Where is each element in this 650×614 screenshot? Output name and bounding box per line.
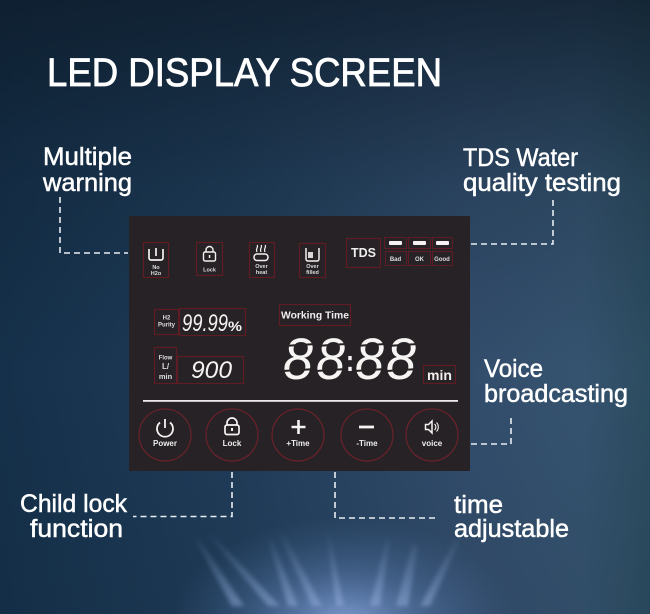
indicator: lock: Lock bbox=[203, 268, 217, 274]
min label: min bbox=[427, 367, 452, 383]
time display: 8 bbox=[355, 327, 384, 392]
H2 purity readout: H2 bbox=[163, 316, 171, 322]
flow readout: 900 bbox=[191, 357, 233, 384]
min label bbox=[424, 366, 456, 384]
button: plus time: +Time bbox=[286, 439, 310, 448]
indicator: over filled: Over bbox=[306, 264, 320, 270]
working time label bbox=[280, 304, 350, 326]
flow readout: L/ bbox=[162, 362, 170, 371]
label: TDS water quality testing bbox=[463, 144, 621, 197]
indicator: no water: No bbox=[152, 265, 160, 271]
label: voice broadcasting bbox=[484, 355, 628, 408]
light rays at the bottom bbox=[170, 510, 520, 614]
indicator: lock bbox=[196, 242, 222, 276]
indicator: no water: H2o bbox=[151, 271, 162, 277]
indicator: TDS water quality: Bad bbox=[390, 257, 401, 263]
label: time adjustable: time bbox=[454, 491, 503, 519]
label: multiple warning: Multiple bbox=[43, 143, 132, 171]
indicator: TDS water quality: Good bbox=[434, 257, 450, 263]
time display bbox=[283, 327, 418, 392]
H2 purity readout: % bbox=[228, 318, 243, 334]
segment gaps bbox=[283, 344, 418, 371]
button: minus time: -Time bbox=[356, 439, 378, 448]
connector: TDS bbox=[470, 200, 553, 244]
connector: multiple warning bbox=[60, 197, 128, 253]
button: voice bbox=[406, 409, 458, 461]
label: voice broadcasting: Voice bbox=[484, 355, 543, 383]
flow readout: Flow bbox=[159, 356, 173, 362]
label: child lock function bbox=[20, 490, 127, 543]
button: minus time bbox=[341, 409, 393, 461]
working time label: Working Time bbox=[281, 310, 349, 322]
flow readout: min bbox=[159, 372, 173, 381]
button: plus time bbox=[272, 409, 324, 461]
indicator: TDS water quality: TDS bbox=[351, 246, 376, 260]
connector: child lock bbox=[133, 472, 232, 516]
panel: LED display bbox=[129, 216, 470, 471]
button: power: Power bbox=[153, 439, 177, 448]
indicator: over heat bbox=[250, 242, 274, 278]
time display: 8 bbox=[386, 327, 416, 392]
label: TDS water quality testing: quality testing bbox=[463, 169, 621, 197]
label: multiple warning bbox=[42, 143, 132, 197]
label: child lock function: function bbox=[30, 515, 123, 543]
label: child lock function: Child lock bbox=[20, 490, 127, 518]
indicator: over heat: Over bbox=[255, 264, 269, 270]
label: time adjustable: adjustable bbox=[454, 515, 569, 543]
label: multiple warning: warning bbox=[42, 169, 132, 197]
divider line bbox=[143, 400, 458, 402]
indicator: TDS water quality: OK bbox=[415, 257, 425, 263]
H2 purity readout bbox=[154, 308, 246, 337]
button: lock bbox=[206, 409, 258, 461]
time display: 8 bbox=[316, 327, 345, 392]
title: LED DISPLAY SCREEN bbox=[47, 51, 442, 95]
button: power bbox=[139, 409, 191, 461]
label: time adjustable bbox=[454, 491, 569, 543]
indicator: no water bbox=[144, 242, 168, 278]
label: TDS water quality testing: TDS Water bbox=[463, 144, 578, 172]
indicator: TDS water quality bbox=[346, 238, 452, 268]
flow readout bbox=[154, 348, 244, 384]
indicator: over filled: filled bbox=[306, 270, 319, 276]
button: lock: Lock bbox=[223, 439, 242, 448]
connector: voice bbox=[470, 418, 511, 444]
H2 purity readout: 99.99 bbox=[182, 310, 228, 337]
connector: time adjustable bbox=[335, 472, 439, 518]
label: voice broadcasting: broadcasting bbox=[484, 380, 628, 408]
time display: : bbox=[346, 345, 354, 378]
button: voice: voice bbox=[422, 439, 443, 448]
time display: 8 bbox=[283, 327, 313, 392]
indicator: over filled bbox=[300, 244, 326, 278]
indicator: over heat: heat bbox=[256, 270, 267, 276]
H2 purity readout: Purity bbox=[158, 322, 176, 328]
